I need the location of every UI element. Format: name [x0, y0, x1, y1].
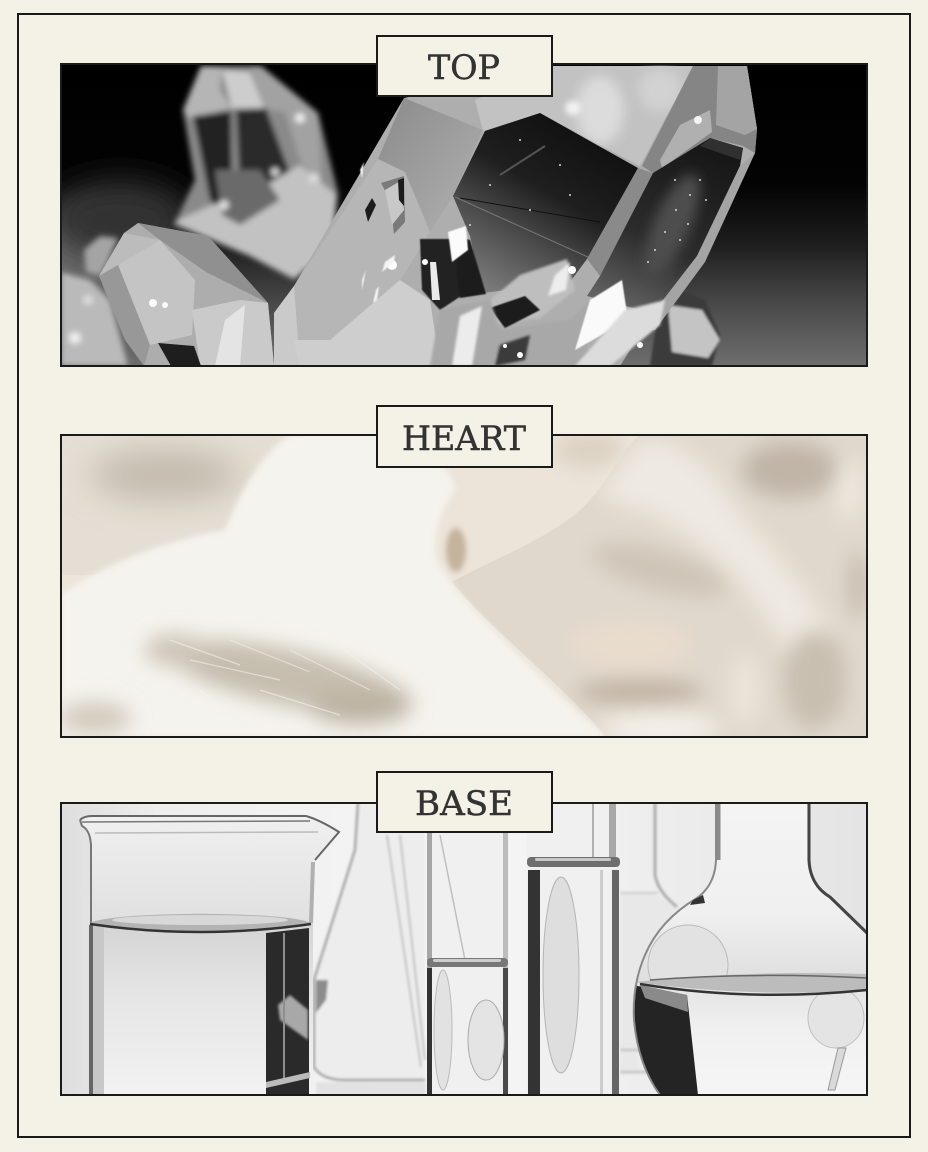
upper bright face — [475, 66, 693, 166]
test tube 1 — [427, 833, 508, 1094]
label: BASE — [377, 772, 552, 832]
test tube 2 — [527, 803, 620, 1095]
cream fold behind — [440, 435, 650, 580]
label: BASE: BASE — [415, 784, 513, 823]
panel: heart fur photo — [59, 432, 868, 744]
main dark face — [453, 113, 638, 293]
velvet — [452, 435, 867, 737]
right dark face — [587, 138, 743, 313]
panel: base glassware photo — [61, 803, 870, 1097]
back flask right — [620, 803, 677, 1075]
right top face — [642, 66, 757, 173]
front left crystal — [99, 223, 274, 366]
panel: top crystals photo — [0, 64, 867, 366]
foreground tan fur patch — [59, 625, 418, 734]
white fur mound — [61, 435, 605, 737]
erlenmeyer flask — [314, 803, 426, 1095]
left blurred cluster — [61, 236, 128, 366]
main crystal base — [274, 66, 757, 366]
fur streaks — [170, 640, 400, 716]
back crystal — [174, 66, 338, 280]
label: TOP: TOP — [428, 48, 500, 87]
right rim — [652, 153, 755, 330]
speckles — [469, 139, 707, 263]
right background stone — [650, 290, 720, 366]
sparkle lower cluster — [387, 226, 665, 366]
left upper tan — [61, 435, 301, 575]
white streaks left — [360, 162, 395, 303]
beaker — [80, 816, 339, 1095]
round flask — [630, 803, 870, 1097]
edge pillar — [587, 168, 653, 276]
left transparent facet — [294, 159, 416, 286]
label: HEART: HEART — [402, 419, 527, 458]
label: TOP — [377, 36, 552, 96]
label: HEART — [377, 406, 552, 467]
left striped face — [378, 98, 483, 232]
